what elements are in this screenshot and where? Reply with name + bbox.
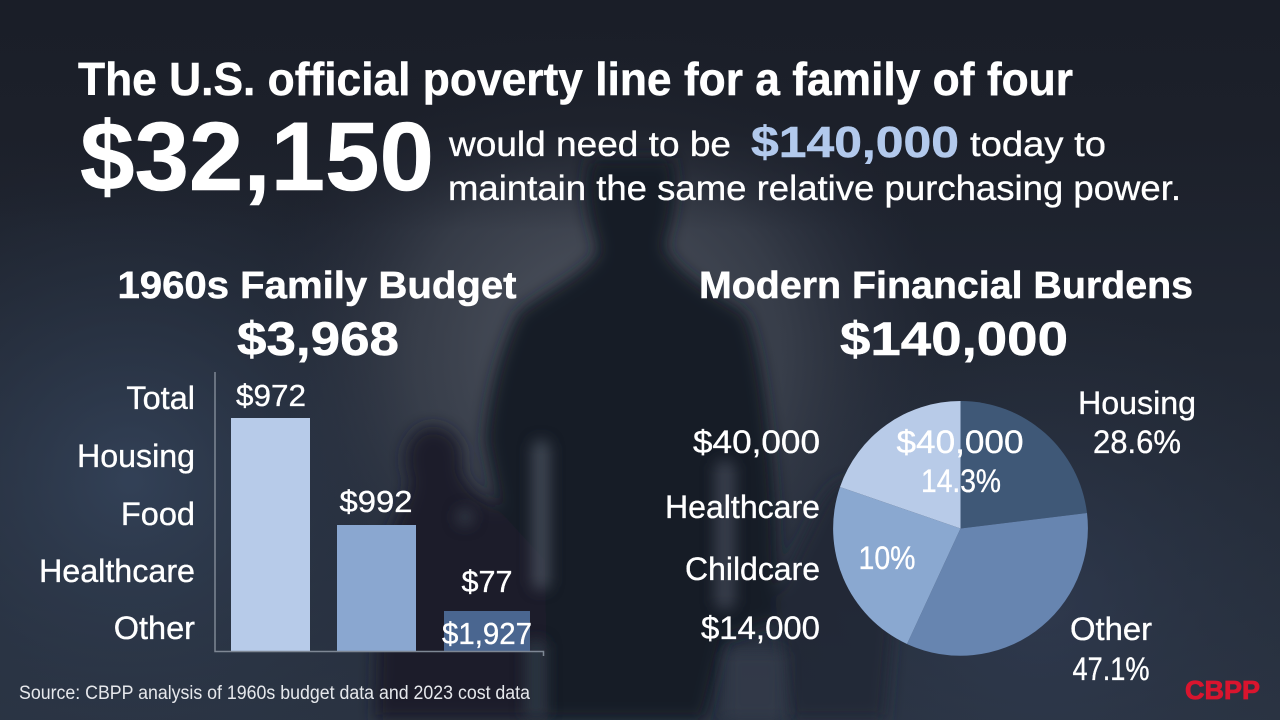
pie inner labels (858, 424, 1024, 576)
pie inner labels: 10% (858, 540, 916, 576)
bar values: $992 (340, 484, 412, 519)
headline: explanatory text: would need to be (448, 125, 731, 164)
heading: modern financial burdens (699, 265, 1193, 365)
logo: CBPP: CBPP (1185, 675, 1260, 705)
pie chart: modern burdens (833, 401, 1088, 656)
heading: modern financial burdens: $140,000 (840, 312, 1068, 365)
headline: poverty line figure: $32,150 (80, 102, 434, 211)
category labels: Housing (77, 438, 195, 474)
category labels: Total (126, 380, 195, 416)
pie labels: right: Housing (1078, 385, 1196, 421)
pie inner labels: $40,000 (896, 424, 1024, 460)
bar values: $1,927 (442, 616, 532, 651)
headline: explanatory text (448, 118, 1181, 208)
headline: explanatory text: today to (970, 125, 1106, 164)
category labels: Healthcare (39, 553, 195, 589)
bars (231, 418, 530, 652)
bar values: $77 (462, 564, 512, 599)
headline: explanatory text: maintain the same relative purchasing power. (448, 169, 1181, 208)
pie inner labels: 14.3% (921, 463, 1001, 499)
silhouette: family (375, 158, 895, 720)
heading: modern financial burdens: Modern Financial Burdens (699, 265, 1193, 307)
pie labels: left: $14,000 (701, 610, 820, 646)
bar values (236, 378, 532, 651)
pie labels: left: Healthcare (665, 489, 820, 525)
category labels (39, 380, 195, 646)
pie labels: right (1070, 385, 1196, 687)
pie labels: left: $40,000 (693, 424, 820, 460)
title: The U.S. official poverty line for a family of four (78, 53, 1073, 105)
pie labels: right: Other (1070, 611, 1152, 647)
headline: explanatory text: $140,000 (751, 118, 959, 167)
silhouette: light gaps between figures (456, 440, 785, 720)
pie labels: left: Childcare (685, 551, 820, 587)
category labels: Other (114, 610, 195, 646)
pie labels: left (665, 424, 820, 646)
bar values: $972 (236, 378, 306, 413)
pie labels: right: 47.1% (1072, 651, 1150, 687)
pie labels: right: 28.6% (1093, 424, 1181, 460)
bar chart: 1960s budget (39, 372, 544, 656)
category labels: Food (121, 496, 195, 532)
heading: 1960s family budget: $3,968 (237, 312, 399, 365)
axes (215, 372, 544, 656)
heading: 1960s family budget (118, 265, 517, 365)
heading: 1960s family budget: 1960s Family Budget (118, 265, 517, 307)
source note: Source: CBPP analysis of 1960s budget data and 2023 cost data (19, 683, 530, 704)
